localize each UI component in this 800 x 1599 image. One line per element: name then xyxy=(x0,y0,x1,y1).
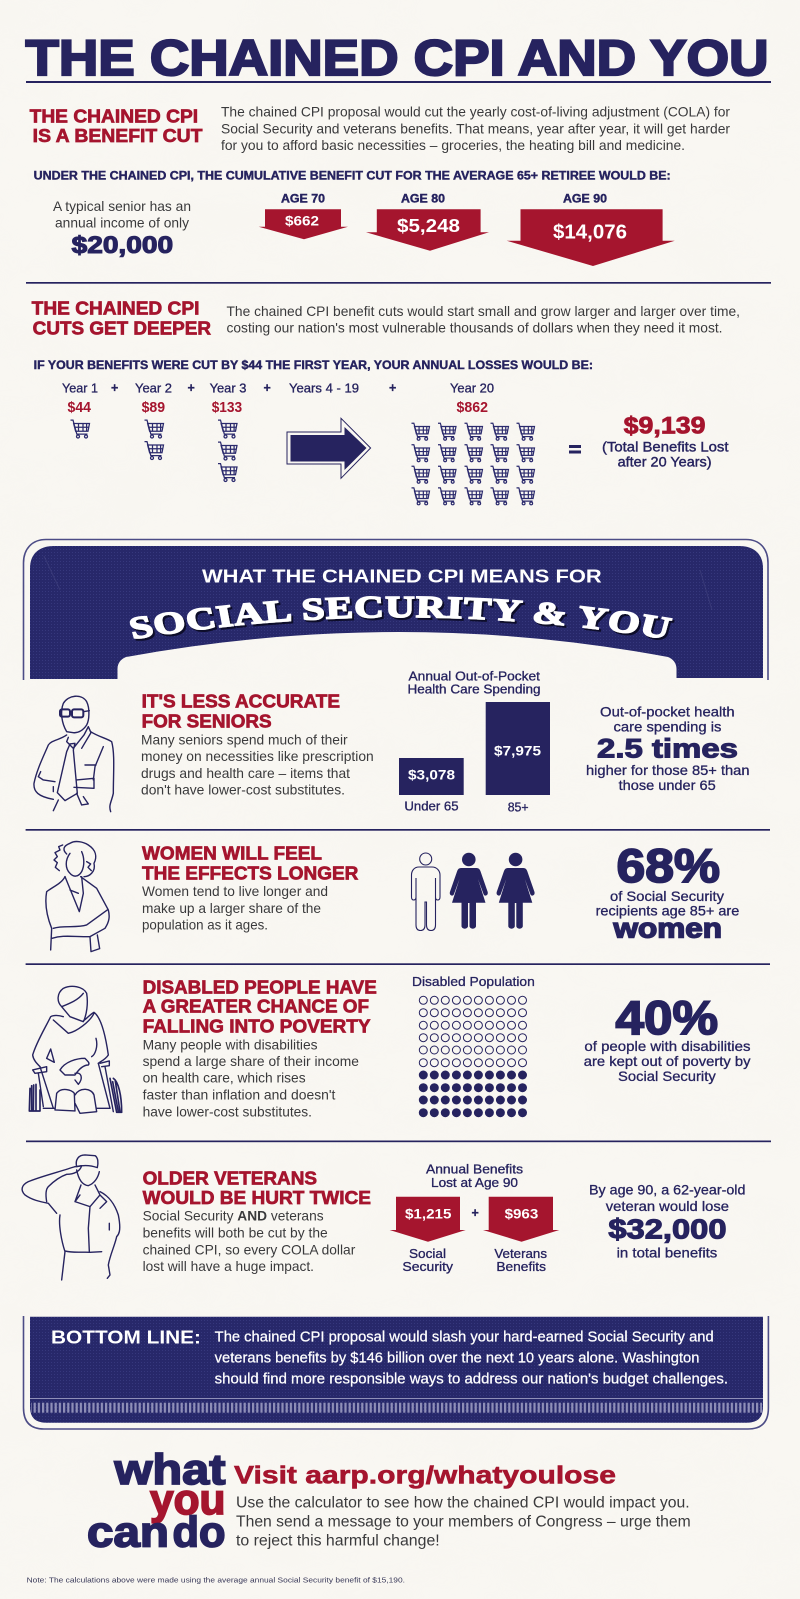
heading: cuts get deeper: CUTS GET DEEPER xyxy=(33,317,211,338)
year loss amounts: $862 xyxy=(456,400,488,416)
heading: women: THE EFFECTS LONGER xyxy=(142,862,358,883)
logo: what you can do xyxy=(87,1446,226,1557)
figure: woman with curly hair xyxy=(46,842,109,952)
heading: less accurate: IT'S LESS ACCURATE xyxy=(142,691,340,712)
figure: man with glasses xyxy=(34,696,114,812)
callout: 32,000: in total benefits xyxy=(617,1245,717,1261)
arrow: veterans benefits xyxy=(483,1197,559,1274)
callout: total benefits lost xyxy=(602,412,729,470)
year labels: Years 4 - 19 xyxy=(289,381,359,395)
year labels: Year 20 xyxy=(450,381,494,395)
text block: seniors: money on necessities like prescription xyxy=(141,748,374,764)
icon: woman xyxy=(450,853,488,929)
heading: less accurate xyxy=(142,691,340,731)
footnote: Note: The calculations above were made using the average annual Social Security benefit of $15,190. xyxy=(27,1575,405,1584)
arrow: veterans benefits: Benefits xyxy=(496,1260,546,1274)
heading: veterans xyxy=(143,1167,371,1208)
year loss amounts: $89 xyxy=(142,400,165,416)
text block: COLA explanation: The chained CPI proposal would cut the yearly cost-of-living adjustment (COLA) for xyxy=(221,104,730,120)
bottom line text: should find more responsible ways to address our nation's budget challenges. xyxy=(215,1371,728,1387)
arrow: age 80: AGE 80 xyxy=(401,194,445,206)
arrow: age 70 xyxy=(259,194,348,239)
callout: total benefits lost: $9,139 xyxy=(624,412,706,439)
year labels: Year 2 xyxy=(135,381,172,395)
logo: what you can do: what xyxy=(113,1446,226,1494)
icon: man outline xyxy=(412,853,440,930)
callout: 68 percent: women xyxy=(612,912,722,943)
arrow: progression to year 20 xyxy=(287,418,371,478)
bottom line text: The chained CPI proposal would slash your hard-earned Social Security and xyxy=(215,1330,714,1346)
callout: 32,000: By age 90, a 62-year-old xyxy=(589,1181,745,1197)
heading: disabled people xyxy=(143,976,377,1037)
arrow: veterans benefits: Veterans xyxy=(494,1247,547,1261)
panel: disabled people xyxy=(29,975,751,1119)
icons: shopping carts, years 1 to 3 xyxy=(70,420,237,482)
year labels: Year 1 xyxy=(62,381,98,395)
bar chart: health care spending: $3,078 xyxy=(408,766,455,782)
callout: 40 percent xyxy=(584,991,750,1084)
callout: 68 percent: 68% xyxy=(616,839,720,892)
callout: 2.5 times: higher for those 85+ than xyxy=(586,762,750,778)
text block: women: population as it ages. xyxy=(142,917,268,933)
callout: 2.5 times: Out-of-pocket health xyxy=(600,704,735,720)
bar chart: health care spending: $7,975 xyxy=(494,742,541,758)
arrow: social security: Social xyxy=(409,1247,446,1261)
text block: women: Women tend to live longer and xyxy=(142,883,328,899)
heading: benefit cut xyxy=(30,106,203,146)
year loss amounts: $44 xyxy=(68,400,91,416)
heading: disabled people: A GREATER CHANCE OF xyxy=(143,996,369,1017)
panel: veterans xyxy=(22,1155,745,1280)
logo: what you can do: can xyxy=(87,1509,169,1557)
figure: person in wheelchair xyxy=(29,986,122,1113)
arrow: age 80: $5,248 xyxy=(397,216,460,236)
panel: benefit cut xyxy=(30,104,730,266)
plus sign: + xyxy=(472,1206,479,1220)
bar chart: health care spending: Health Care Spending xyxy=(408,683,541,697)
dot chart: disabled population: Disabled Population xyxy=(412,975,535,989)
bar chart: health care spending: Under 65 xyxy=(404,800,459,814)
call to action: Then send a message to your members of Congress – urge them xyxy=(236,1514,691,1531)
year labels: + xyxy=(264,381,271,395)
text block: disabilities: spend a large share of their income xyxy=(143,1053,359,1069)
year labels: + xyxy=(111,381,118,395)
text block: disabilities: faster than inflation and doesn't xyxy=(143,1087,336,1103)
heading: less accurate: FOR SENIORS xyxy=(142,710,272,731)
callout: 68 percent xyxy=(596,839,740,943)
figure: saluting veteran xyxy=(22,1155,120,1280)
text block: women: make up a larger share of the xyxy=(142,900,321,916)
text block: deeper cuts: The chained CPI benefit cuts would start small and grow larger and larger over time, xyxy=(226,303,740,319)
text block: disabilities xyxy=(143,1036,359,1119)
callout: 68 percent: of Social Security xyxy=(610,888,724,904)
logo: what you can do: you xyxy=(150,1476,226,1524)
banner heading: WHAT THE CHAINED CPI MEANS FOR xyxy=(202,565,602,586)
heading: benefit cut: IS A BENEFIT CUT xyxy=(33,125,203,146)
text block: veterans: lost will have a huge impact. xyxy=(143,1258,314,1274)
bar chart: health care spending: 85+ xyxy=(508,801,529,815)
equals sign xyxy=(569,445,581,454)
text block: seniors xyxy=(141,731,374,798)
panel: cuts get deeper xyxy=(32,297,740,505)
text block: disabilities: have lower-cost substitutes. xyxy=(143,1103,312,1119)
text block: COLA explanation: for you to afford basic necessities – groceries, the heating bill and medicine. xyxy=(221,137,685,153)
bar chart: health care spending: Annual Out-of-Pocket xyxy=(408,670,541,684)
heading: disabled people: DISABLED PEOPLE HAVE xyxy=(143,976,377,997)
call to action: to reject this harmful change! xyxy=(236,1532,440,1549)
callout: 68 percent: recipients age 85+ are xyxy=(596,903,740,919)
call to action: Use the calculator to see how the chained CPI would impact you. xyxy=(236,1495,690,1512)
bottom line text xyxy=(215,1330,728,1387)
callout: 2.5 times xyxy=(586,704,750,793)
dot chart: disabled population xyxy=(412,975,535,1117)
subheading: cumulative cut: UNDER THE CHAINED CPI, THE CUMULATIVE BENEFIT CUT FOR THE AVERAGE 65+ RETIREE WOULD BE: xyxy=(34,170,671,182)
arrow: social security xyxy=(390,1197,466,1274)
text block: seniors: drugs and health care – items that xyxy=(141,765,350,781)
callout: typical senior income: A typical senior has an xyxy=(53,198,191,214)
heading: women: WOMEN WILL FEEL xyxy=(142,842,322,863)
year loss amounts: $133 xyxy=(212,400,242,416)
heading: women xyxy=(142,842,358,883)
text block: disabilities: on health care, which rises xyxy=(143,1070,306,1086)
arrow: social security: Security xyxy=(402,1260,454,1274)
text block: veterans: Social Security AND veterans xyxy=(143,1208,324,1224)
callout: 40 percent: 40% xyxy=(616,991,718,1044)
chart: annual benefits lost at age 90: Annual Benefits xyxy=(426,1163,523,1177)
callout: 2.5 times: those under 65 xyxy=(619,777,716,793)
icons: shopping carts, year 20 xyxy=(412,423,534,505)
chart: annual benefits lost at age 90: Lost at Age 90 xyxy=(431,1176,518,1190)
arrow: age 90: $14,076 xyxy=(553,221,627,243)
callout: typical senior income: annual income of only xyxy=(55,215,189,231)
text block: veterans: benefits will both be cut by the xyxy=(143,1224,328,1240)
callout: 40 percent: of people with disabilities xyxy=(584,1038,750,1054)
bottom line text: veterans benefits by $146 billion over the next 10 years alone. Washington xyxy=(215,1350,699,1366)
year labels: Year 3 xyxy=(210,381,246,395)
callout: typical senior income: $20,000 xyxy=(72,232,173,259)
heading: cuts get deeper xyxy=(32,297,211,338)
callout: 2.5 times: care spending is xyxy=(614,719,721,735)
banner arched title: SOCIAL SECURITY & YOU xyxy=(130,596,675,641)
text block: deeper cuts xyxy=(226,303,740,336)
arrow: social security: $1,215 xyxy=(405,1205,452,1221)
text block: COLA explanation xyxy=(221,104,730,153)
heading: benefit cut: THE CHAINED CPI xyxy=(30,106,198,127)
bar chart: health care spending xyxy=(399,670,550,815)
text block: seniors: don't have lower-cost substitutes. xyxy=(141,782,345,798)
text block: disabilities: Many people with disabilities xyxy=(143,1036,318,1052)
banner: what it means for social security xyxy=(22,538,769,680)
year labels: + xyxy=(389,381,396,395)
text block: deeper cuts: costing our nation's most vulnerable thousands of dollars when they need it most. xyxy=(226,320,722,336)
callout: total benefits lost: after 20 Years) xyxy=(618,454,712,470)
text block: veterans: chained CPI, so every COLA dollar xyxy=(143,1241,356,1257)
year labels xyxy=(62,381,494,395)
arrow: age 90 xyxy=(507,194,675,266)
text block: COLA explanation: Social Security and veterans benefits. That means, year after year, it will get harder xyxy=(221,120,730,136)
arrow: age 90: AGE 90 xyxy=(563,194,607,206)
bottom line label: BOTTOM LINE: xyxy=(51,1326,201,1347)
text block: seniors: Many seniors spend much of their xyxy=(141,731,348,747)
callout: 32,000 xyxy=(589,1181,745,1261)
year labels: + xyxy=(188,381,195,395)
callout: 40 percent: are kept out of poverty by xyxy=(584,1053,750,1069)
panel: seniors xyxy=(34,670,750,815)
subheading: annual losses: IF YOUR BENEFITS WERE CUT BY $44 THE FIRST YEAR, YOUR ANNUAL LOSSES WOULD BE: xyxy=(34,360,593,372)
arrow: age 80 xyxy=(366,194,489,251)
callout: typical senior income xyxy=(53,198,191,259)
text block: veterans xyxy=(143,1208,356,1274)
chart: annual benefits lost at age 90 xyxy=(390,1163,559,1274)
callout: 40 percent: Social Security xyxy=(618,1068,716,1084)
call to action: Visit aarp.org/whatyoulose xyxy=(234,1461,616,1489)
arrow: veterans benefits: $963 xyxy=(505,1205,539,1221)
call to action xyxy=(234,1461,691,1549)
heading: veterans: OLDER VETERANS xyxy=(143,1167,317,1188)
arrow: age 70: AGE 70 xyxy=(281,194,325,206)
title: THE CHAINED CPI AND YOU xyxy=(26,29,768,86)
panel: bottom line xyxy=(24,1316,768,1429)
arrow: age 70: $662 xyxy=(285,212,319,228)
text block: women xyxy=(142,883,328,933)
heading: cuts get deeper: THE CHAINED CPI xyxy=(32,297,199,318)
icon: woman xyxy=(497,853,535,929)
heading: disabled people: FALLING INTO POVERTY xyxy=(143,1016,371,1037)
logo: what you can do: do xyxy=(172,1509,226,1557)
callout: 32,000: $32,000 xyxy=(608,1213,726,1244)
panel: women xyxy=(46,839,740,952)
callout: 32,000: veteran would lose xyxy=(606,1198,729,1214)
callout: total benefits lost: (Total Benefits Lost xyxy=(602,439,729,455)
callout: 2.5 times: 2.5 times xyxy=(597,734,738,764)
heading: veterans: WOULD BE HURT TWICE xyxy=(143,1187,371,1208)
year loss amounts xyxy=(68,400,488,416)
